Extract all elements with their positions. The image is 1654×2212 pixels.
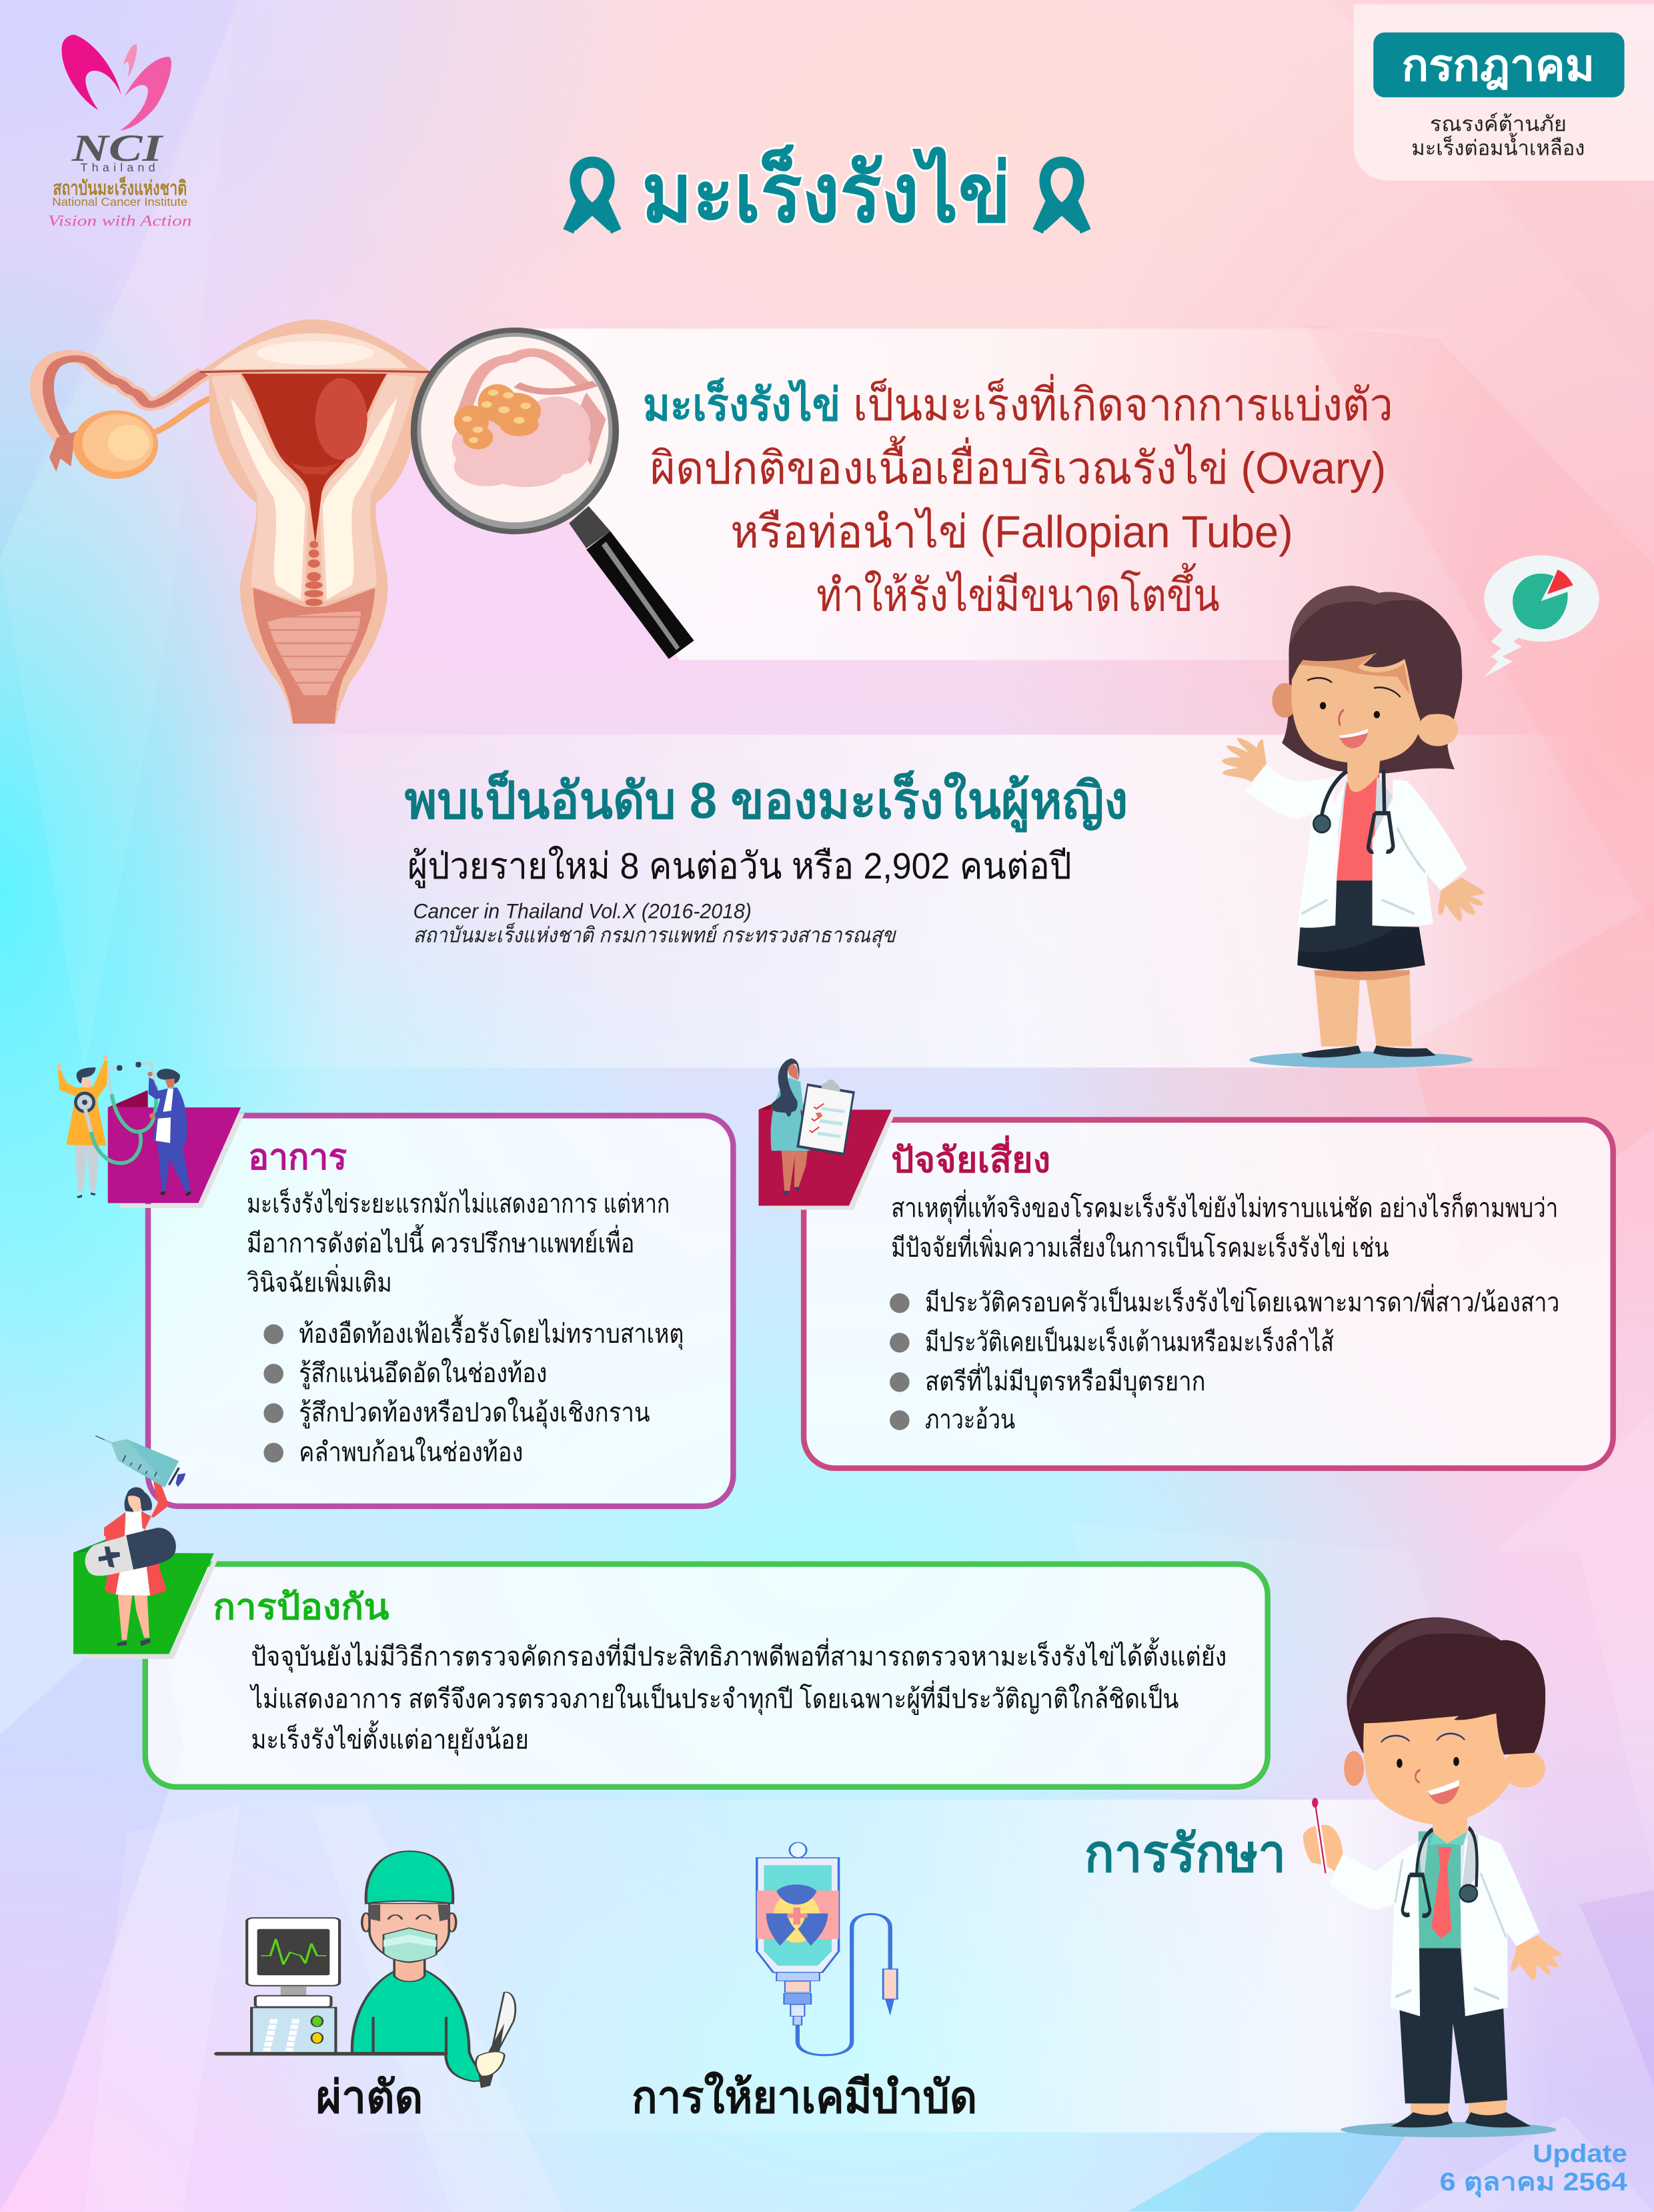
facial features — [1397, 1759, 1403, 1768]
speech bubble: pie chart — [1484, 556, 1599, 677]
risk list: ภาวะอ้วน — [925, 1405, 1015, 1435]
campaign line 1: รณรงค์ต้านภัย — [1430, 112, 1567, 136]
coat left — [1329, 1842, 1420, 2017]
character: male doctor — [1303, 1618, 1562, 2137]
coat right — [1460, 1831, 1540, 2017]
line 1 keyword: มะเร็งรังไข่ — [643, 378, 840, 430]
text block: definition — [643, 374, 1393, 620]
card: risk factors — [758, 1059, 1613, 1468]
text: motto: Vision with Action — [48, 212, 192, 229]
body — [352, 1970, 488, 2081]
head — [125, 1488, 152, 1512]
neck — [394, 1959, 425, 1982]
month text: กรกฎาคม — [1402, 41, 1595, 91]
mask — [383, 1928, 436, 1962]
text: institute name Thai: สถาบันมะเร็งแห่งชาติ — [53, 176, 187, 199]
stethoscope — [1403, 1828, 1477, 1916]
risk illustration — [758, 1059, 895, 1210]
prevention paragraph: ปัจจุบันยังไม่มีวิธีการตรวจคัดกรองที่มีประสิทธิภาพดีพอที่สามารถตรวจหามะเร็งรังไข่ได้ตั้งแต่ยัง — [251, 1637, 1226, 1673]
legs — [1315, 970, 1412, 1047]
hair back — [1282, 586, 1462, 773]
prevention paragraph — [249, 1637, 1226, 1756]
line 1: เป็นมะเร็งที่เกิดจากการแบ่งตัว — [853, 374, 1393, 430]
icon: surgeon and monitor — [214, 1851, 516, 2088]
symptoms intro: มะเร็งรังไข่ระยะแรกมักไม่แสดงอาการ แต่หาก — [247, 1187, 670, 1219]
risk heading: ปัจจัยเสี่ยง — [891, 1135, 1050, 1180]
cap — [366, 1851, 453, 1903]
legs — [118, 1594, 149, 1640]
thermometer — [1315, 1802, 1325, 1873]
coat right — [1373, 779, 1467, 927]
icon: right ribbon — [1038, 162, 1086, 231]
logo: National Cancer Institute — [48, 35, 192, 229]
symptoms list: รู้สึกปวดท้องหรือปวดในอุ้งเชิงกราน — [299, 1397, 650, 1429]
face — [1291, 656, 1420, 763]
neck — [1432, 1817, 1467, 1844]
risk list: สตรีที่ไม่มีบุตรหรือมีบุตรยาก — [925, 1363, 1206, 1398]
skirt — [1297, 881, 1425, 971]
person in blue — [157, 1142, 191, 1192]
heading: treatment: การรักษา — [1084, 1824, 1286, 1883]
campaign line 2: มะเร็งต่อมน้ำเหลือง — [1411, 133, 1585, 160]
risk intro: มีปัจจัยที่เพิ่มความเสี่ยงในการเป็นโรคมะเร็งรังไข่ เช่น — [891, 1229, 1389, 1263]
hands — [1511, 1935, 1562, 1981]
head — [362, 1913, 370, 1932]
card: symptoms — [57, 1055, 733, 1506]
source line 2: สถาบันมะเร็งแห่งชาติ กรมการแพทย์ กระทรวงสาธารณสุข — [413, 922, 897, 948]
character: female doctor — [1222, 586, 1485, 1068]
icon: left ribbon — [568, 162, 616, 231]
title text: มะเร็งรังไข่ — [642, 144, 1011, 239]
neck — [1347, 758, 1380, 792]
cervical canal — [304, 541, 323, 606]
table — [214, 2052, 448, 2055]
shoes — [1391, 2111, 1531, 2127]
card frame — [145, 1564, 1268, 1787]
lens ring — [411, 328, 619, 534]
update date: 6 ตุลาคม 2564 — [1440, 2168, 1627, 2197]
ligament — [155, 398, 211, 432]
illustration: uterus and ovary — [40, 320, 432, 724]
risk intro — [891, 1189, 1558, 1263]
woman with clipboard — [782, 1151, 808, 1191]
hands — [1222, 738, 1267, 782]
handle — [586, 531, 694, 659]
shoes — [1302, 1045, 1436, 1057]
ears — [1272, 683, 1297, 718]
symptoms heading: อาการ — [248, 1138, 347, 1177]
line 4: ทำให้รังไข่มีขนาดโตขึ้น — [816, 562, 1220, 620]
stethoscope — [1321, 769, 1393, 852]
source line 1: Cancer in Thailand Vol.X (2016-2018) — [413, 899, 752, 923]
prevention paragraph: ไม่แสดงอาการ สตรีจึงควรตรวจภายในเป็นประจำทุกปี โดยเฉพาะผู้ที่มีประวัติญาติใกล้ชิดเป็น — [249, 1680, 1179, 1715]
symptoms illustration — [57, 1055, 245, 1208]
shirt — [1419, 1831, 1461, 1949]
syringe — [111, 1439, 179, 1488]
card frame — [804, 1120, 1613, 1468]
coat — [104, 1512, 125, 1594]
treatment: chemotherapy — [632, 1842, 977, 2123]
text block: incidence — [405, 770, 1128, 948]
incidence numbers: ผู้ป่วยรายใหม่ 8 คนต่อวัน หรือ 2,902 คนต่อปี — [407, 845, 1072, 889]
symptoms list: คลำพบก้อนในช่องท้อง — [299, 1436, 523, 1467]
pants — [1399, 2007, 1507, 2103]
prevention heading: การป้องกัน — [213, 1588, 389, 1627]
vaginal canal — [253, 588, 375, 724]
pill — [85, 1536, 133, 1576]
lapels — [1331, 776, 1393, 837]
illustration: magnifying glass — [411, 328, 694, 659]
update label: Update — [1533, 2140, 1627, 2168]
text: Thailand: Thailand — [81, 161, 155, 174]
ankles — [1411, 2100, 1507, 2116]
treatment: surgery — [214, 1851, 516, 2123]
line 3: หรือท่อนำไข่ (Fallopian Tube) — [730, 506, 1293, 557]
cream wall right — [319, 375, 417, 602]
prevention illustration — [73, 1436, 218, 1659]
label: chemotherapy: การให้ยาเคมีบำบัด — [632, 2071, 977, 2123]
lens glass — [421, 337, 608, 522]
tube in lens — [461, 352, 586, 419]
band: intro background — [533, 329, 1486, 660]
prevention paragraph: มะเร็งรังไข่ตั้งแต่อายุยังน้อย — [251, 1720, 529, 1756]
risk list: มีประวัติเคยเป็นมะเร็งเต้านมหรือมะเร็งลำไส้ — [925, 1325, 1334, 1357]
facial features — [1320, 702, 1326, 709]
person in yellow — [75, 1145, 99, 1192]
symptoms list: ท้องอืดท้องเฟ้อเรื้อรังโดยไม่ทราบสาเหตุ — [299, 1314, 684, 1350]
coat left — [1245, 763, 1345, 928]
text: NCI: NCI — [71, 127, 164, 169]
card frame — [148, 1115, 733, 1506]
clipboard — [796, 1083, 855, 1155]
tumor cluster — [454, 384, 541, 450]
text: institute name English: National Cancer Institute — [52, 195, 187, 209]
body — [200, 320, 432, 724]
month badge — [1373, 33, 1625, 97]
hair back — [1347, 1618, 1545, 1753]
title — [568, 144, 1086, 239]
incidence heading: พบเป็นอันดับ 8 ของมะเร็งในผู้หญิง — [405, 770, 1128, 833]
tie — [1431, 1847, 1452, 1939]
face — [1363, 1714, 1510, 1824]
symptoms list: รู้สึกแน่นอึดอัดในช่องท้อง — [299, 1357, 547, 1389]
shirt — [1337, 772, 1380, 881]
band: statistics background — [169, 735, 1579, 1067]
line 2: ผิดปกติของเนื้อเยื่อบริเวณรังไข่ (Ovary) — [650, 436, 1386, 494]
panel: campaign month — [1354, 4, 1654, 181]
fimbriae — [49, 427, 89, 472]
band: treatment background — [141, 1800, 1551, 2133]
label: surgery: ผ่าตัด — [316, 2073, 423, 2123]
ovary — [73, 410, 158, 479]
icon: IV bag — [757, 1842, 897, 2055]
ears — [1344, 1751, 1364, 1786]
monitor — [247, 1918, 339, 1986]
stethoscope — [85, 1063, 156, 1163]
fringe — [1289, 587, 1461, 718]
symptoms intro — [247, 1187, 670, 1298]
scalpel — [492, 1992, 516, 2048]
ovary lobes in lens — [452, 397, 591, 487]
symptoms intro: วินิจฉัยเพิ่มเติม — [247, 1264, 392, 1298]
symptoms intro: มีอาการดังต่อไปนี้ ควรปรึกษาแพทย์เพื่อ — [247, 1223, 634, 1258]
risk list — [890, 1283, 1559, 1435]
fallopian tube — [40, 356, 205, 451]
cream wall left — [211, 375, 309, 602]
uterine cavity — [241, 374, 387, 543]
update note — [1440, 2140, 1627, 2197]
symptoms list — [263, 1314, 684, 1467]
card: prevention — [73, 1436, 1268, 1787]
fringe — [1347, 1618, 1545, 1754]
icon: butterfly mark — [61, 35, 171, 131]
